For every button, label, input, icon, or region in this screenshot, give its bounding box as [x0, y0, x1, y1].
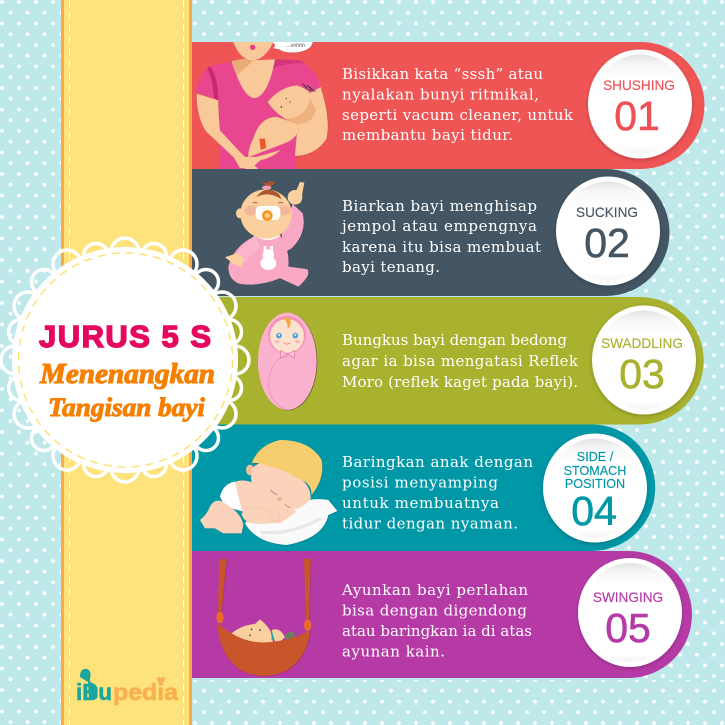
logo mark: [80, 669, 98, 700]
body text: membantu bayi tidur.: [342, 126, 513, 144]
panel: 04 side / stomach position: [192, 424, 655, 551]
yellow vertical ribbon: [61, 0, 192, 725]
panel: 01 shushing: [192, 42, 704, 169]
body text: Baringkan anak dengan: [342, 453, 533, 471]
body text: [341, 581, 532, 660]
illustration: baby with pacifier: [225, 181, 308, 287]
body text: tidur dengan nyaman.: [342, 514, 518, 532]
number badge 01: SHUSHING: [603, 78, 675, 93]
number badge 03: SWADDLING: [601, 336, 683, 351]
number badge 03: [592, 306, 696, 414]
body text: [342, 331, 579, 391]
body text: Moro (reflek kaget pada bayi).: [342, 373, 578, 391]
logo: iBupedia: iBu: [76, 679, 112, 705]
number badge 04: POSITION: [565, 477, 625, 491]
body text: karena itu bisa membuat: [342, 238, 541, 256]
number badge 03: 03: [619, 351, 665, 397]
body text: seperti vacum cleaner, untuk: [342, 106, 574, 124]
body text: bayi tenang.: [342, 258, 440, 276]
body text: Bisikkan kata “sssh” atau: [342, 65, 543, 83]
body text: posisi menyamping: [342, 474, 498, 492]
heading: Menenangkan: Menenangkan: [39, 358, 215, 390]
body text: untuk membuatnya: [342, 494, 499, 512]
illustration: swaddled baby: [258, 313, 317, 410]
number badge 01: 01: [614, 93, 660, 139]
illustration: mother holding baby: [196, 42, 328, 169]
panel: 05 swinging: [192, 551, 692, 678]
illustration: sleeping baby on pillow: [200, 440, 337, 545]
band 5: [192, 551, 692, 678]
body text: agar ia bisa mengatasi Reflek: [342, 352, 579, 370]
band 4: [192, 424, 655, 551]
number badge 02: [556, 176, 660, 286]
logo: iBupedia: pedia: [113, 679, 178, 705]
title badge: scalloped circle: [1, 238, 249, 482]
body text: atau baringkan ia di atas: [342, 622, 532, 640]
white disc: [12, 247, 238, 473]
number badge 02: 02: [584, 220, 630, 266]
body text: nyalakan bunyi ritmikal,: [342, 86, 539, 104]
body text: [340, 197, 541, 276]
heading: Jurus 5 S: JURUS 5 S: [39, 319, 211, 354]
body text: ayunan kain.: [342, 642, 445, 660]
number badge 04: 04: [571, 488, 617, 534]
number badge 04: SIDE /: [577, 450, 614, 464]
panel: 03 swaddling: [192, 297, 704, 424]
body text: Bungkus bayi dengan bedong: [342, 331, 567, 349]
illustration: baby in hammock: [216, 559, 311, 676]
body text: Ayunkan bayi perlahan: [341, 581, 528, 599]
band 1: [192, 42, 704, 169]
number badge 05: [578, 558, 682, 667]
body text: Biarkan bayi menghisap: [342, 197, 537, 215]
heading: Tangisan bayi: Tangisan bayi: [48, 393, 206, 422]
panel: 02 sucking: [192, 169, 670, 296]
number badge 05: 05: [605, 605, 651, 651]
band 3: [192, 297, 704, 424]
body text: jempol atau empengnya: [340, 217, 537, 235]
number badge 01: [588, 50, 692, 158]
band 2: [192, 169, 670, 296]
dashed ring: [18, 253, 232, 467]
number badge 05: SWINGING: [593, 590, 663, 605]
number badge 04: [543, 434, 647, 542]
scalloped edge: [1, 238, 249, 482]
body text: [342, 453, 533, 532]
body text: [342, 65, 574, 144]
illustration: mother holding baby: ...shhhh: [286, 43, 305, 49]
number badge 02: SUCKING: [576, 205, 638, 220]
body text: bisa dengan digendong: [342, 602, 527, 620]
number badge 04: STOMACH: [564, 464, 626, 478]
logo: iBupedia: [76, 669, 178, 705]
